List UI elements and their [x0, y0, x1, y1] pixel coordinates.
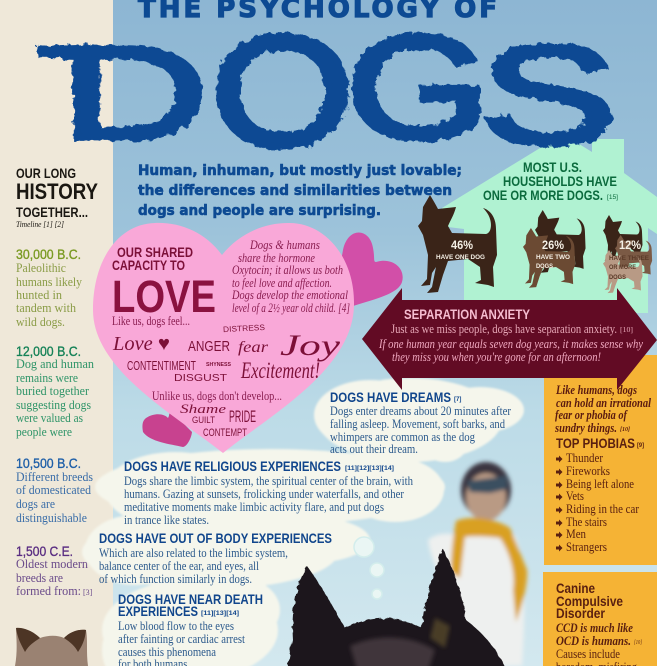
text: out of body experiences: Which are also related to the limbic system,	[99, 546, 288, 560]
clouds	[82, 378, 524, 666]
love heading: OUR SHARED	[117, 244, 193, 260]
big word: DOGS: O	[211, 5, 354, 179]
emotions dogs lack: Shame	[180, 401, 226, 416]
disorder text: CCD is much like	[556, 620, 633, 635]
text: religious experiences	[124, 458, 414, 527]
timeline: 30,000 B.C.: wild dogs.	[16, 314, 65, 329]
magenta heart: upper right	[335, 232, 403, 307]
timeline: 12,000 B.C.: were valued as	[16, 410, 83, 425]
emotions dogs feel: Excitement!	[240, 358, 320, 383]
timeline: 12,000 B.C.: buried together	[16, 383, 90, 398]
emotions dogs feel: SHYNESS	[206, 362, 232, 368]
emotions dogs lack: PRIDE	[229, 407, 256, 426]
text: religious experiences: DOGS HAVE RELIGIOUS EXPERIENCES	[124, 458, 341, 474]
phobia intro: fear or phobia of	[555, 407, 628, 422]
house heading: ONE OR MORE DOGS.	[483, 187, 603, 203]
phobia list: Men	[566, 526, 586, 541]
text: dogs have dreams: whimpers are common as the dog	[330, 430, 476, 444]
separation text: they miss you when you're gone for an afternoon!	[392, 349, 601, 364]
timeline: 10,500 B.C.: 10,500 B.C.	[16, 455, 81, 471]
big word: DOGS	[36, 5, 617, 179]
emotions dogs lack: GUILT	[192, 415, 215, 425]
separation heading: SEPARATION ANXIETY	[404, 306, 531, 322]
text: religious experiences: humans. Gazing at sunsets, frolicking under waterfalls, and other	[124, 487, 405, 501]
photo: blurred woman with sunglasses	[428, 462, 527, 666]
house heading: [15]	[607, 194, 618, 201]
emotions dogs feel: DISGUST	[174, 373, 227, 384]
subtitle: dogs and people are surprising.	[138, 203, 381, 219]
dog: 46%: HAVE ONE DOG	[436, 254, 485, 261]
disorder heading: Compulsive	[556, 593, 623, 609]
subtitle	[138, 163, 462, 219]
text: near death experiences: Low blood flow to the eyes	[118, 619, 234, 633]
love heading: CAPACITY TO	[112, 257, 185, 273]
timeline: 30,000 B.C.: hunted in	[16, 287, 62, 302]
text: dogs have dreams: Dogs enter dreams about 20 minutes after	[330, 404, 512, 418]
phobia list	[556, 450, 640, 554]
phobia list: Being left alone	[566, 476, 634, 491]
text: religious experiences: meditative moments make limbic activity flare, and put dogs	[124, 500, 384, 514]
house heading: HOUSEHOLDS HAVE	[503, 173, 617, 189]
thought bubbles	[354, 537, 384, 599]
emotions dogs feel: fear	[238, 339, 269, 356]
text: dogs have dreams	[330, 389, 512, 456]
timeline: 30,000 B.C.: humans likely	[16, 274, 82, 289]
subtitle: the differences and similarities between	[138, 183, 452, 199]
text: religious experiences: [11][12][13][14]	[345, 465, 394, 472]
oxytocin text: level of a 2½ year old child. [4]	[232, 301, 350, 315]
timeline: 10,500 B.C.: of domesticated	[16, 482, 91, 497]
text: dogs have dreams: acts out their dream.	[330, 442, 418, 456]
phobia list: Fireworks	[566, 463, 610, 478]
big word: DOGS: S	[480, 17, 617, 173]
emotions dogs lack: Unlike us, dogs don't develop...	[152, 389, 282, 403]
dogs: 26%: HAVE TWO	[536, 254, 570, 261]
disorder text: OCD is humans.	[556, 633, 631, 648]
big word: DOGS: D	[60, 18, 208, 167]
oxytocin text: Dogs develop the emotional	[231, 288, 348, 302]
oxytocin text: Oxytocin; it allows us both	[232, 263, 343, 277]
timeline heading	[16, 165, 98, 229]
timeline: 1,500 C.E.	[16, 543, 93, 598]
timeline: 10,500 B.C.: dogs are	[16, 496, 55, 511]
phobia heading: [9]	[637, 443, 644, 449]
timeline: 1,500 C.E.: formed from:	[16, 583, 81, 598]
phobia list: Thunder	[566, 450, 604, 465]
timeline heading: Timeline [1] [2]	[16, 220, 64, 229]
disorder heading: Disorder	[556, 605, 605, 621]
timeline: 1,500 C.E.: Oldest modern	[16, 556, 88, 571]
house heading	[483, 159, 618, 203]
panel: top phobias	[544, 355, 657, 565]
panel: separation anxiety arrow	[362, 288, 657, 390]
phobia list: The stairs	[566, 514, 607, 529]
timeline: 10,500 B.C.	[16, 455, 93, 525]
dogs: 26%	[523, 210, 586, 288]
house shape	[442, 134, 657, 313]
panel: house of dog ownership	[418, 134, 657, 313]
dogs: 12%	[603, 215, 652, 293]
timeline: 1,500 C.E.: [3]	[83, 588, 93, 597]
text: out of body experiences: balance center of the ear, and eyes, all	[99, 559, 259, 573]
text: near death experiences: after fainting or cardiac arrest	[118, 632, 245, 646]
phobia list: Riding in the car	[566, 501, 640, 516]
timeline: 1,500 C.E.: breeds are	[16, 570, 63, 585]
timeline: 30,000 B.C.: Paleolithic	[16, 260, 66, 275]
timeline: 12,000 B.C.: people were	[16, 424, 72, 439]
timeline: 1,500 C.E.: 1,500 C.E.	[16, 543, 73, 559]
panel: canine compulsive disorder	[543, 572, 657, 666]
timeline: 30,000 B.C.: tandem with	[16, 300, 76, 315]
oxytocin text: Dogs & humans	[249, 238, 320, 252]
text: dogs have dreams: DOGS HAVE DREAMS	[330, 389, 451, 405]
timeline heading: HISTORY	[16, 179, 98, 204]
dogs: 26%: 26%	[542, 238, 564, 252]
emotions dogs feel: Like us, dogs feel...	[112, 314, 190, 328]
emotions dogs feel: DISTRESS	[223, 323, 265, 334]
disorder heading	[556, 580, 623, 621]
oxytocin text: share the hormone	[238, 251, 315, 265]
dogs: 12%: OR MORE	[609, 264, 637, 271]
disorder text	[556, 620, 642, 666]
timeline: 10,500 B.C.: distinguishable	[16, 510, 87, 525]
emotions dogs feel: Love ♥	[112, 333, 170, 355]
emotions dogs feel: Joy	[280, 329, 341, 362]
phobia intro	[554, 382, 651, 435]
text: religious experiences: Dogs share the limbic system, the spiritual center of the brain, with	[124, 474, 414, 488]
timeline: 30,000 B.C.: 30,000 B.C.	[16, 246, 81, 262]
text: out of body experiences: of which function similarly in dogs.	[99, 572, 252, 586]
love heading	[112, 244, 216, 322]
separation text: [10]	[620, 326, 633, 334]
text: dogs have dreams: [7]	[454, 397, 461, 403]
love heading: LOVE	[112, 271, 216, 322]
timeline: 12,000 B.C.: Dog and human	[16, 356, 94, 371]
photo: dog head	[283, 548, 515, 666]
timeline: 30,000 B.C.	[16, 246, 82, 329]
dog: 46%: 46%	[451, 238, 473, 252]
timeline heading: OUR LONG	[16, 165, 76, 181]
magenta heart: lower left	[142, 412, 192, 447]
text: dogs have dreams: falling asleep. Movement, soft barks, and	[330, 417, 506, 431]
dogs: 12%: 12%	[619, 238, 641, 252]
house heading: MOST U.S.	[523, 159, 582, 175]
timeline	[15, 165, 98, 666]
text: out of body experiences: DOGS HAVE OUT OF BODY EXPERIENCES	[99, 530, 332, 546]
phobia intro: sundry things.	[554, 420, 617, 435]
subtitle: Human, inhuman, but mostly just lovable;	[138, 163, 462, 179]
oxytocin text: to feel love and affection.	[232, 276, 332, 290]
phobia intro: Like humans, dogs	[555, 382, 637, 397]
dogs: 12%: DOGS	[609, 274, 627, 281]
beige timeline column	[0, 0, 113, 666]
oxytocin text	[231, 238, 350, 315]
panel: love heart	[93, 223, 354, 453]
timeline: 12,000 B.C.: suggesting dogs	[16, 397, 91, 412]
dogs: 26%: DOGS	[536, 263, 554, 270]
timeline: 12,000 B.C.: remains were	[16, 370, 78, 385]
icon: dog head	[15, 628, 88, 666]
disorder text: Causes include	[556, 646, 620, 661]
phobia intro: [10]	[620, 427, 630, 433]
emotions dogs feel: ANGER	[188, 338, 230, 355]
disorder heading: Canine	[556, 580, 595, 596]
separation text	[378, 321, 643, 364]
emotions dogs lack: CONTEMPT	[203, 427, 247, 439]
dogs: 12%: HAVE THREE	[609, 255, 650, 262]
timeline: 12,000 B.C.: 12,000 B.C.	[16, 343, 81, 359]
timeline: 10,500 B.C.: Different breeds	[16, 469, 93, 484]
text: near death experiences	[118, 591, 263, 666]
text: near death experiences: [11][13][14]	[201, 610, 239, 617]
phobia list: Vets	[566, 488, 584, 503]
emotions dogs lack	[152, 389, 282, 439]
timeline: 12,000 B.C.	[16, 343, 94, 439]
text: religious experiences: in trance like states.	[124, 513, 209, 527]
emotions dogs feel	[112, 314, 341, 384]
big word: DOGS: G	[346, 6, 490, 170]
dog: 46%	[418, 195, 497, 293]
text: near death experiences: DOGS HAVE NEAR DEATH	[118, 591, 263, 607]
text: near death experiences: EXPERIENCES	[118, 603, 198, 619]
emotions dogs feel: CONTENTIMENT	[127, 358, 196, 373]
disorder text: [10]	[634, 640, 642, 646]
text: out of body experiences	[99, 530, 332, 586]
phobia heading: TOP PHOBIAS	[556, 435, 635, 451]
phobia list: Strangers	[566, 539, 607, 554]
timeline heading: TOGETHER...	[16, 204, 88, 220]
text: near death experiences: causes this phenomena	[118, 645, 216, 659]
